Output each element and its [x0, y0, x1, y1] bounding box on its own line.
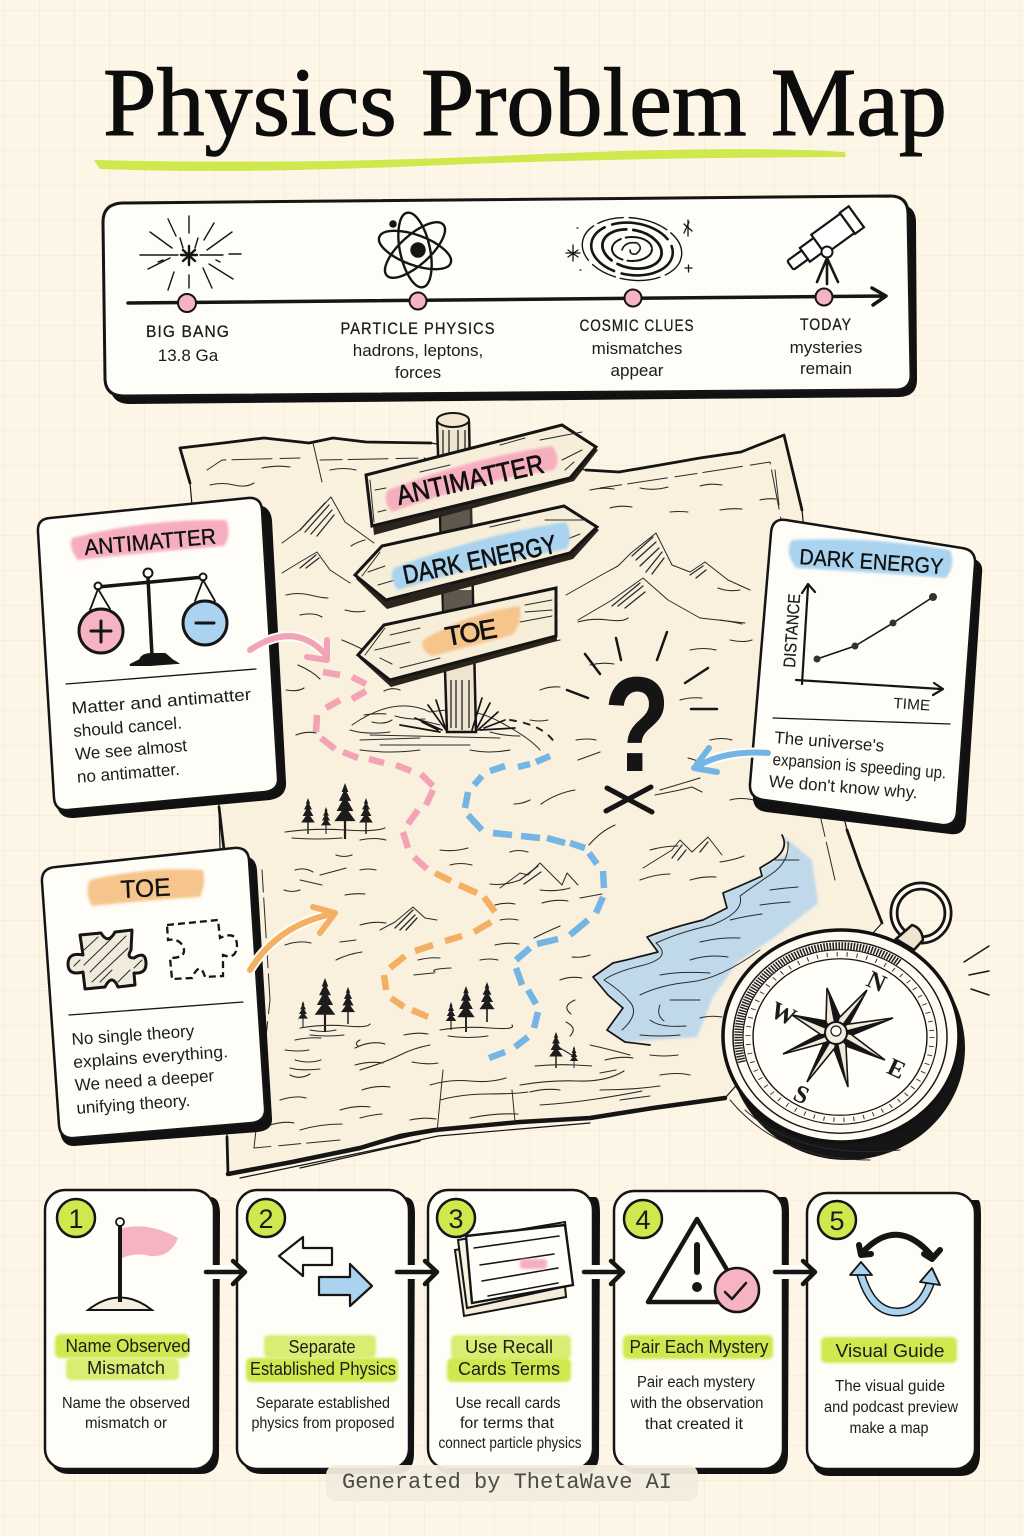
- step 1 text: mismatch or: [85, 1415, 167, 1432]
- timeline markers: [178, 288, 832, 312]
- signpost: [350, 413, 599, 752]
- step 5 text: The visual guide: [835, 1378, 945, 1395]
- step 5 badge: [818, 1201, 856, 1239]
- label: particle physics: [340, 319, 496, 382]
- icon: galaxy: [566, 211, 692, 287]
- icon: compass: W: [766, 997, 800, 1032]
- step 3 badge: [437, 1199, 475, 1237]
- step 5 text: make a map: [850, 1420, 928, 1437]
- label: cosmic clues: [580, 316, 694, 380]
- sign: dark energy: [355, 506, 599, 609]
- panel card: [103, 196, 911, 396]
- step 1 text: [62, 1395, 190, 1432]
- card heading: [87, 869, 204, 906]
- trail: pink: [316, 672, 433, 869]
- arrow: antimatter to trail: [250, 636, 327, 660]
- card text: no antimatter.: [76, 760, 180, 787]
- card heading: [789, 539, 952, 578]
- rays: [567, 632, 717, 709]
- step 2 text: Separate established: [256, 1395, 390, 1412]
- card text: should cancel.: [73, 713, 182, 741]
- panel shadow: [108, 204, 917, 404]
- card shadow: [48, 856, 272, 1146]
- step 4 text: with the observation: [630, 1395, 764, 1412]
- step 4 badge: 4: [635, 1205, 651, 1235]
- step 2 card: [237, 1190, 415, 1474]
- step 1 card: [45, 1190, 220, 1474]
- step 5 card: [807, 1193, 981, 1476]
- title text: Physics Problem Map: [103, 49, 947, 156]
- icon: warning with check: [648, 1219, 759, 1312]
- X mark: [606, 787, 652, 812]
- step 4 text: [630, 1374, 764, 1433]
- label: particle physics: forces: [395, 363, 441, 382]
- map dark edges: [228, 1098, 725, 1174]
- step 1 heading: Mismatch: [87, 1358, 165, 1378]
- icon: compass: [723, 886, 989, 1160]
- icon: big bang: [140, 216, 241, 290]
- arrow: dark energy to question: [694, 748, 768, 772]
- card text: No single theory: [71, 1021, 195, 1049]
- step 1 heading: [55, 1334, 190, 1380]
- card: dark energy: DARK ENERGY: [799, 544, 944, 579]
- card text: We see almost: [74, 736, 188, 764]
- sign label: dark energy: DARK ENERGY: [400, 529, 559, 590]
- card body: [42, 848, 265, 1138]
- label: particle physics: hadrons, leptons,: [353, 341, 483, 360]
- icon: telescope: [782, 206, 864, 284]
- sign label: TOE: TOE: [443, 613, 499, 652]
- step 1 badge: 1: [68, 1204, 84, 1234]
- sign label: antimatter: ANTIMATTER: [394, 449, 547, 511]
- label: cosmic clues: COSMIC CLUES: [580, 316, 694, 335]
- card: antimatter: ANTIMATTER: [83, 524, 217, 560]
- step 3 text: [438, 1395, 582, 1452]
- compass letters: N: [862, 966, 890, 998]
- label: big bang: 13.8 Ga: [158, 346, 219, 365]
- card text: We need a deeper: [74, 1066, 215, 1095]
- question mark: ?: [604, 650, 670, 801]
- trail: orange: [384, 873, 495, 1017]
- step 3 heading: [447, 1335, 571, 1382]
- card text: unifying theory.: [76, 1091, 191, 1118]
- step 2 heading: Established Physics: [250, 1359, 396, 1379]
- panel: timeline: [103, 196, 917, 404]
- trail: dotted start: [510, 720, 556, 745]
- card body: [38, 498, 278, 810]
- card text: [71, 685, 258, 787]
- icon: balance scale: [79, 568, 227, 665]
- label: big bang: BIG BANG: [146, 322, 230, 341]
- card body: [750, 520, 975, 825]
- terrain strokes: [210, 466, 776, 1130]
- icon: recall cards: [455, 1222, 573, 1316]
- step 2 heading: [246, 1335, 398, 1382]
- step 4 text: that created it: [645, 1416, 744, 1433]
- label: today: TODAY: [800, 315, 852, 334]
- arrow: TOE to trail: [250, 907, 335, 970]
- axis label: time: TIME: [893, 695, 931, 715]
- step 2 heading: Separate: [288, 1337, 356, 1357]
- step 5 heading: Visual Guide: [836, 1341, 944, 1361]
- title: [94, 49, 947, 171]
- map folds: [313, 443, 779, 1132]
- card text: expansion is speeding up.: [772, 750, 947, 783]
- step 3 text: connect particle physics: [438, 1435, 582, 1452]
- card text: [768, 728, 949, 805]
- card: dark energy: [750, 520, 982, 834]
- card: TOE: [42, 848, 272, 1146]
- question mark and X: [567, 632, 717, 812]
- icon: separating arrows: [279, 1237, 372, 1306]
- sign: TOE: [358, 588, 557, 687]
- card text: Matter and antimatter: [71, 685, 252, 718]
- line chart: [780, 584, 943, 715]
- label: today: remain: [800, 359, 852, 378]
- card text: We don't know why.: [768, 772, 918, 802]
- label: particle physics: PARTICLE PHYSICS: [340, 319, 496, 338]
- label: big bang: [146, 322, 230, 365]
- icon: cycle arrows: [850, 1235, 940, 1312]
- step 2 badge: [247, 1199, 285, 1237]
- step 5 text: and podcast preview: [824, 1399, 959, 1416]
- sign: antimatter: [366, 425, 598, 535]
- step 3 heading: Cards Terms: [458, 1359, 560, 1379]
- label: today: mysteries: [790, 338, 862, 357]
- label: cosmic clues: appear: [611, 361, 664, 380]
- arrow: step 4 to 5: [775, 1261, 815, 1284]
- step 1 badge: [57, 1199, 95, 1237]
- label: today: [790, 315, 862, 378]
- label: cosmic clues: mismatches: [592, 339, 682, 358]
- mountains: [282, 497, 750, 930]
- grass: [400, 698, 515, 732]
- icon: flag: [88, 1218, 178, 1310]
- step 2 badge: 2: [258, 1204, 274, 1234]
- card text: The universe's: [774, 728, 885, 756]
- trail: blue: [465, 756, 604, 1058]
- step 3 badge: 3: [448, 1204, 464, 1234]
- compass body: [729, 936, 965, 1160]
- step 3 card: [428, 1190, 600, 1474]
- icon: puzzle piece solid: [68, 930, 146, 989]
- icon: puzzle piece outline: [167, 920, 237, 979]
- trees: [285, 783, 592, 1068]
- card: TOE: TOE: [120, 873, 171, 904]
- card text: explains everything.: [73, 1042, 229, 1072]
- compass rays: [964, 946, 989, 995]
- step 3 text: Use recall cards: [456, 1395, 561, 1412]
- illustration: treasure map: [180, 413, 882, 1178]
- title underline: [94, 149, 846, 171]
- mound and grass: [350, 706, 540, 752]
- compass ring: [894, 886, 948, 940]
- sea: [593, 835, 818, 1045]
- compass star: [783, 988, 893, 1087]
- card: antimatter: [38, 498, 286, 818]
- step 1 text: Name the observed: [62, 1395, 190, 1412]
- card heading: [71, 520, 229, 560]
- step 1 heading: Name Observed: [66, 1336, 190, 1356]
- step 5 badge: 5: [829, 1206, 845, 1236]
- step 3 heading: Use Recall: [465, 1337, 553, 1357]
- step 4 badge: [624, 1200, 662, 1238]
- map inner border: [207, 458, 835, 1148]
- arrow: step 2 to 3: [397, 1261, 437, 1284]
- axis label: distance: DISTANCE: [780, 593, 804, 668]
- watermark: [326, 1465, 698, 1501]
- step 5 heading: [821, 1337, 957, 1363]
- card text: [71, 1019, 232, 1118]
- arrow: step 3 to 4: [584, 1261, 623, 1284]
- step 4 card: [614, 1191, 789, 1474]
- map parchment: [180, 435, 882, 1174]
- step 2 text: [252, 1395, 394, 1432]
- icon: compass: S: [789, 1080, 813, 1110]
- timeline arrow: [128, 288, 886, 305]
- icon: compass: E: [883, 1053, 909, 1085]
- card shadow: [753, 530, 982, 834]
- step 4 heading: Pair Each Mystery: [630, 1337, 768, 1357]
- step 5 text: [824, 1378, 959, 1437]
- watermark: Generated by ThetaWave AI: [342, 1470, 672, 1495]
- step 2 text: physics from proposed: [252, 1415, 394, 1432]
- card shadow: [44, 505, 286, 818]
- icon: atom: [374, 210, 456, 290]
- arrow: step 1 to 2: [206, 1261, 245, 1284]
- process steps: [45, 1190, 981, 1476]
- step 3 text: for terms that: [460, 1415, 555, 1432]
- step 4 text: Pair each mystery: [637, 1374, 755, 1391]
- post: [437, 416, 476, 732]
